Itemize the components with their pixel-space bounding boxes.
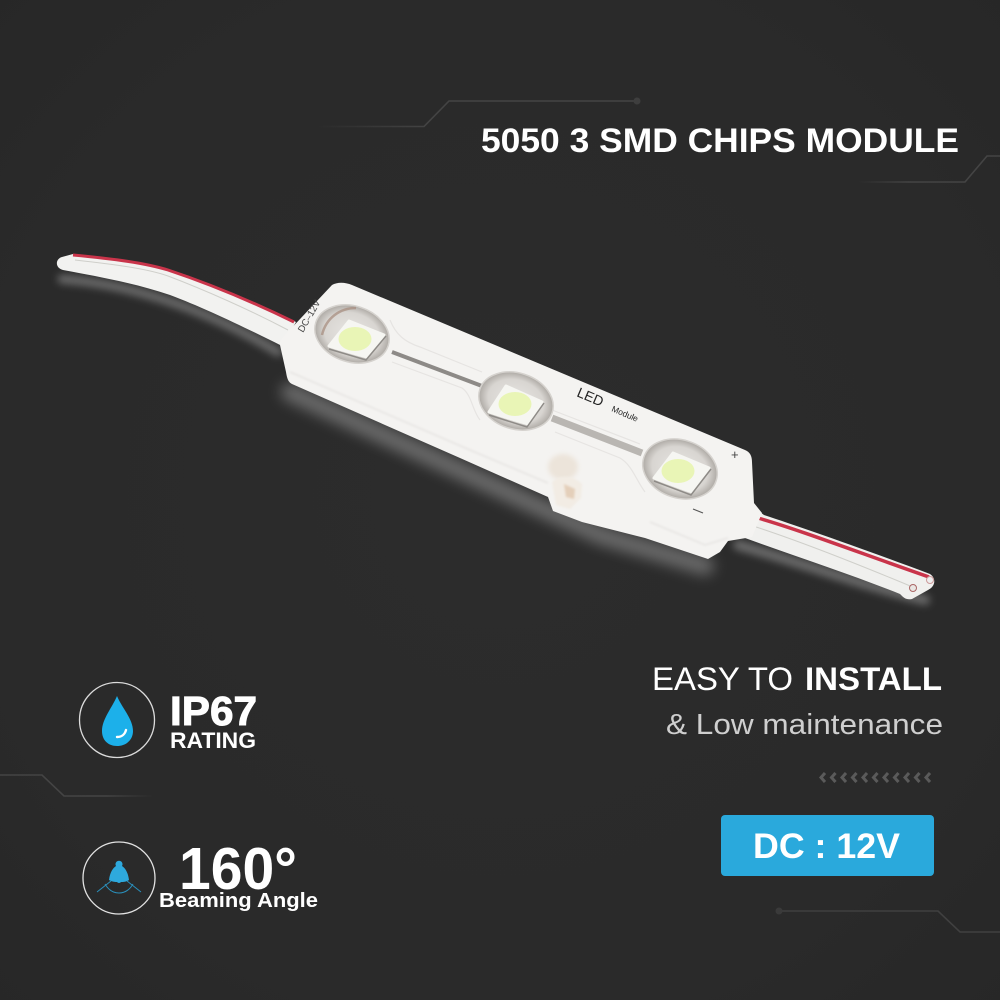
LED chip 3 [635,430,725,508]
chevron row [821,773,930,782]
feature: beaming angle [83,836,318,914]
module body [280,283,762,559]
heading: install bold: INSTALL [805,661,942,697]
subheading: low maintenance: & Low maintenance [666,709,943,741]
heading: easy to install: EASY TO [652,661,793,697]
module print: LED Module: LED [575,384,606,409]
LED chip 1 [307,296,397,372]
beaming angle label: Beaming Angle [159,890,318,912]
IP67 label: IP67 [170,688,257,734]
module print: minus [693,509,703,513]
channel between LEDs [392,352,642,453]
left wire [57,254,296,346]
icon: beam angle [83,842,155,914]
mounting nub [548,454,582,509]
rating label: RATING [170,728,256,753]
right wire [745,506,934,599]
module print: LED Module: Module [610,404,640,424]
product reflection [62,279,925,600]
voltage text: DC : 12V [753,827,901,866]
feature: IP67 rating [80,682,257,758]
icon: water drop [80,682,154,758]
voltage badge [721,815,934,876]
160 degree label: 160° [179,836,297,902]
module print: plus: + [731,447,739,462]
circuit line: right of title [858,156,1000,182]
circuit line: top [318,98,640,126]
module side shading [290,372,728,545]
LED module product photo [57,254,934,599]
title: 5050 3 SMD CHIPS MODULE [481,122,959,160]
LED chip 2 [471,363,561,439]
circuit line: left [0,775,153,796]
module print: LED Module [575,384,640,424]
plate outlines [390,320,645,492]
circuit line: bottom right [776,908,1000,932]
module print: DC 12V: DC⎯12V [296,298,324,334]
